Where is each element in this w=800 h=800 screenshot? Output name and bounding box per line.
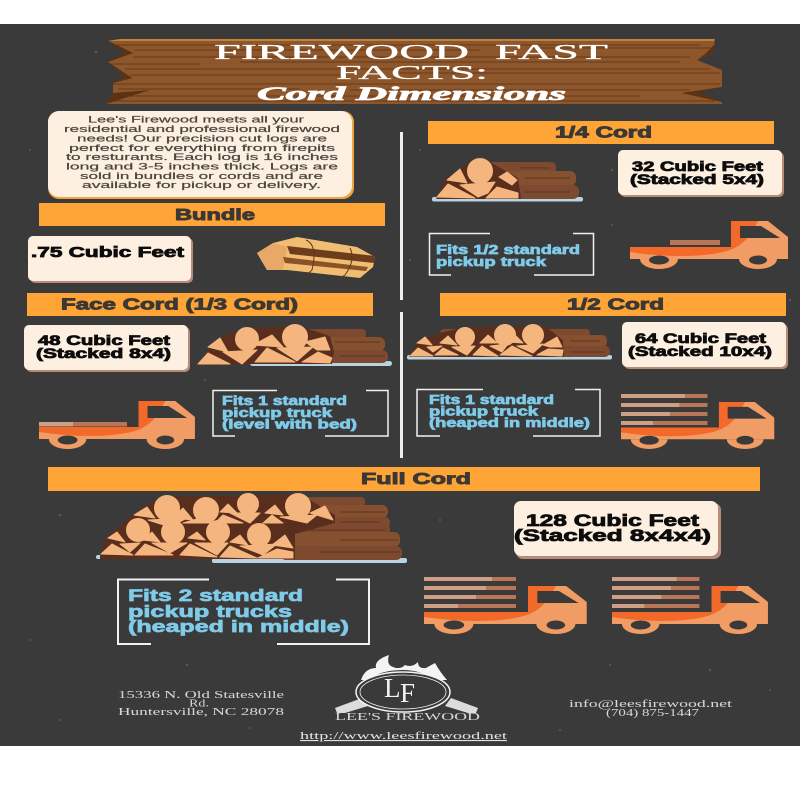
quarter cord volume card: 32 Cubic Feet bbox=[632, 158, 763, 174]
face cord volume card bbox=[24, 325, 190, 372]
full cord volume card: 128 Cubic Feet bbox=[526, 511, 699, 530]
title: FACTS: bbox=[336, 62, 488, 84]
divider lower bbox=[400, 312, 403, 458]
half cord truck fit note bbox=[417, 390, 600, 436]
title banner: wood plank bbox=[106, 39, 722, 104]
icon: truck level load bbox=[39, 401, 195, 449]
full cord truck fit note: (heaped in middle) bbox=[128, 617, 349, 636]
half cord truck fit note: Fits 1 standard bbox=[429, 392, 554, 407]
half cord volume card: 64 Cubic Feet bbox=[635, 330, 766, 346]
quarter cord volume card: (Stacked 5x4) bbox=[630, 171, 764, 187]
section: half cord header: 1/2 Cord bbox=[567, 296, 664, 314]
bundle volume card bbox=[28, 236, 193, 283]
full cord truck fit note: Fits 2 standard bbox=[128, 586, 303, 605]
footer contact: info@leesfirewood.net bbox=[569, 699, 732, 710]
divider upper bbox=[400, 132, 403, 300]
face cord truck fit note: pickup truck bbox=[222, 405, 333, 420]
full cord truck fit note bbox=[118, 580, 369, 644]
face cord volume card: (Stacked 8x4) bbox=[36, 345, 171, 361]
logo: Lee's Firewood: LEE'S FIREWOOD bbox=[335, 712, 480, 723]
title: FAST bbox=[495, 40, 608, 64]
intro panel: available for pickup or delivery. bbox=[82, 180, 321, 190]
logo: Lee's Firewood: L bbox=[384, 673, 400, 703]
logo: Lee's Firewood bbox=[335, 655, 480, 723]
icon: firewood bundle bbox=[257, 237, 375, 279]
icon: truck heaped load bbox=[621, 394, 774, 449]
log pile: full cord bbox=[96, 494, 407, 563]
title: FIREWOOD bbox=[214, 40, 469, 64]
quarter cord truck fit note bbox=[430, 234, 594, 275]
intro panel: perfect for everything from firepits bbox=[69, 143, 336, 153]
intro panel: to resturants. Each log is 16 inches bbox=[66, 152, 339, 162]
footer address: Huntersville, NC 28078 bbox=[118, 707, 284, 718]
face cord truck fit note bbox=[213, 390, 388, 436]
section: bundle header: Bundle bbox=[175, 207, 255, 224]
bundle volume card: .75 Cubic Feet bbox=[31, 244, 184, 261]
section: face cord header: Face Cord (1/3 Cord) bbox=[61, 296, 298, 314]
log pile: quarter cord bbox=[432, 158, 583, 202]
intro panel bbox=[48, 111, 354, 199]
face cord truck fit note: (level with bed) bbox=[222, 416, 357, 432]
half cord volume card: (Stacked 10x4) bbox=[628, 343, 772, 359]
icon: truck one bbox=[424, 577, 587, 634]
footer contact bbox=[569, 699, 732, 719]
footer address: Rd. bbox=[189, 698, 209, 710]
section: bundle header bbox=[39, 203, 385, 226]
log pile: half cord bbox=[407, 324, 612, 360]
quarter cord volume card bbox=[618, 150, 784, 197]
face cord volume card: 48 Cubic Feet bbox=[38, 332, 170, 348]
intro panel: residential and professional firewood bbox=[64, 124, 340, 134]
footer address bbox=[118, 690, 285, 718]
full cord truck fit note: pickup trucks bbox=[128, 602, 292, 621]
full cord volume card bbox=[514, 501, 721, 559]
title bbox=[214, 40, 608, 105]
intro panel: Lee's Firewood meets all your bbox=[88, 114, 304, 124]
icon: truck two bbox=[612, 577, 768, 634]
title: Cord Dimensions bbox=[257, 84, 566, 105]
half cord volume card bbox=[622, 322, 788, 369]
half cord truck fit note: pickup truck bbox=[429, 404, 539, 418]
intro panel: sold in bundles or cords and are bbox=[80, 171, 323, 181]
intro panel: needs! Our precision cut logs are bbox=[77, 134, 327, 144]
half cord truck fit note: (heaped in middle) bbox=[429, 415, 590, 430]
section: full cord header: Full Cord bbox=[361, 471, 471, 488]
footer address: 15336 N. Old Statesville bbox=[118, 690, 285, 701]
section: quarter cord header bbox=[428, 121, 774, 144]
log pile: face cord bbox=[198, 324, 392, 366]
face cord truck fit note: Fits 1 standard bbox=[222, 393, 347, 408]
logo: Lee's Firewood: F bbox=[400, 678, 415, 708]
icon: truck quarter load bbox=[630, 221, 788, 269]
section: full cord header bbox=[48, 467, 760, 491]
full cord volume card: (Stacked 8x4x4) bbox=[514, 526, 711, 545]
section: face cord header bbox=[27, 293, 373, 316]
section: half cord header bbox=[440, 293, 786, 316]
footer contact: (704) 875-1447 bbox=[606, 708, 699, 719]
quarter cord truck fit note: Fits 1/2 standard bbox=[436, 242, 580, 257]
intro panel: long and 3-5 inches thick. Logs are bbox=[66, 162, 338, 172]
footer website link: http://www.leesfirewood.net bbox=[300, 730, 507, 742]
section: quarter cord header: 1/4 Cord bbox=[555, 124, 652, 142]
quarter cord truck fit note: pickup truck bbox=[436, 254, 547, 269]
